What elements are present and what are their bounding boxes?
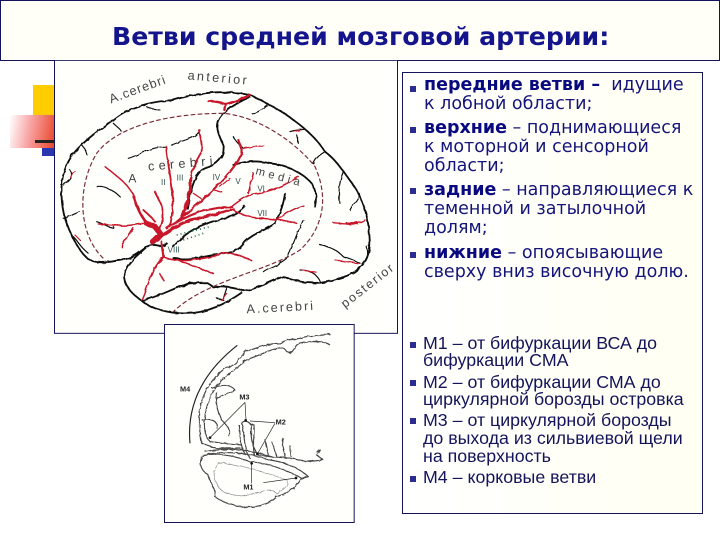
brain labels: A.cerebri xyxy=(107,73,168,106)
brain outline and sulci xyxy=(61,92,370,313)
panel: brain lateral view with arteries xyxy=(54,60,398,334)
roman numeral branch labels xyxy=(161,173,267,254)
list: M1–M4 segments: М1 – от бифуркации ВСА до xyxy=(423,333,657,353)
brain labels: posterior xyxy=(338,260,397,311)
list: M1–M4 segments: циркулярной борозды островка xyxy=(423,389,684,409)
title text: Ветви средней мозговой артерии: xyxy=(112,22,609,51)
brain labels: anterior xyxy=(187,68,250,88)
middle cerebral artery branches xyxy=(70,95,365,300)
panel: description text xyxy=(402,72,703,514)
list: artery branch directions: передние ветви – идущие xyxy=(424,75,684,95)
segment labels: M2 xyxy=(276,417,286,426)
segment labels xyxy=(180,385,286,491)
list: artery branch directions: нижние – опоясывающие xyxy=(424,243,663,263)
brain labels: A.cerebri xyxy=(246,299,315,316)
list: artery branch directions: верхние – поднимающиеся xyxy=(424,118,681,138)
list: M1–M4 segments: бифуркации СМА xyxy=(423,350,568,370)
list: artery branch directions xyxy=(410,75,693,282)
list: M1–M4 segments: М2 – от бифуркации СМА до xyxy=(423,372,661,392)
roman numeral branch labels: II xyxy=(161,178,165,187)
list: M1–M4 segments: М3 – от циркулярной борозды xyxy=(423,410,672,430)
title banner xyxy=(0,0,720,61)
segment markers xyxy=(209,419,297,479)
list: artery branch directions: теменной и затылочной xyxy=(424,199,646,219)
brain labels: media xyxy=(254,165,305,190)
roman numeral branch labels: V xyxy=(235,177,241,186)
segment labels: M1 xyxy=(243,482,254,491)
list: M1–M4 segments xyxy=(410,333,684,487)
list: artery branch directions: долям; xyxy=(424,218,488,238)
list: artery branch directions: сверху вниз височную долю. xyxy=(424,262,689,282)
M4 arc arrow xyxy=(190,345,237,443)
list: M1–M4 segments: до выхода из сильвиевой щели xyxy=(423,428,683,448)
roman numeral branch labels: VIII xyxy=(168,245,180,254)
roman numeral branch labels: III xyxy=(177,174,183,183)
dashed arterial territory boundary xyxy=(83,113,323,312)
panel: M1–M4 segment diagram xyxy=(164,324,355,523)
brain labels: cerebri xyxy=(147,154,217,174)
roman numeral branch labels: IV xyxy=(213,173,221,182)
segment labels: M3 xyxy=(239,393,250,402)
list: M1–M4 segments: М4 – корковые ветви xyxy=(423,467,596,487)
roman numeral branch labels: VII xyxy=(257,209,267,218)
insula stippling xyxy=(177,227,210,240)
list: artery branch directions: к моторной и сенсорной xyxy=(424,137,649,157)
list: artery branch directions: области; xyxy=(424,156,504,176)
roman numeral branch labels: VI xyxy=(257,185,265,194)
list: artery branch directions: задние – направляющиеся к xyxy=(424,180,693,200)
decorative corner squares xyxy=(10,85,54,156)
brain labels xyxy=(107,68,397,316)
segment labels: M4 xyxy=(180,385,191,394)
list: artery branch directions: к лобной области; xyxy=(424,94,592,114)
cortex and artery outlines xyxy=(199,334,330,507)
leader lines to segments xyxy=(210,402,296,483)
brain labels: A xyxy=(128,172,136,186)
list: M1–M4 segments: на поверхность xyxy=(423,446,551,466)
